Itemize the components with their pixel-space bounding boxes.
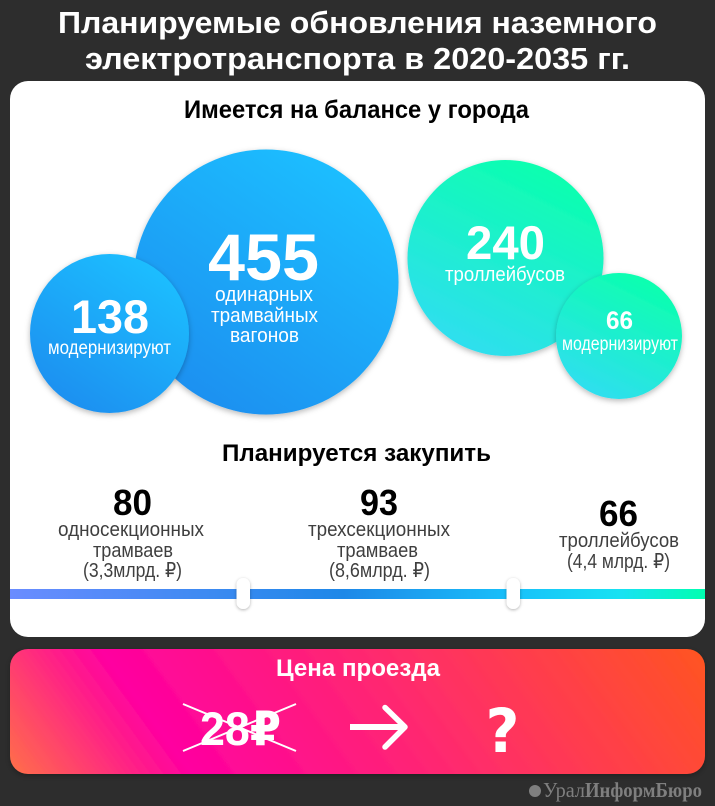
bubble: 240 trolleybuses: троллейбусов <box>445 264 565 286</box>
purchase: 66 trolleybuses: троллейбусов <box>559 530 679 552</box>
purchase: 80 single-section trams: (3,3млрд. ₽) <box>83 560 182 582</box>
purchase: 93 three-section trams <box>308 482 450 582</box>
heading: planned purchases: Планируется закупить <box>222 440 491 467</box>
purchase: 66 trolleybuses: (4,4 млрд. ₽) <box>567 551 670 573</box>
watermark: Урал <box>543 778 585 802</box>
watermark: ИнформБюро <box>585 778 702 802</box>
panel: fleet and purchases <box>10 81 705 637</box>
bubble: 138 modernized trams: 138 <box>71 290 149 343</box>
timeline bar <box>10 578 705 609</box>
purchase: 93 three-section trams: трехсекционных <box>308 519 450 541</box>
purchase: 93 three-section trams: (8,6млрд. ₽) <box>329 560 430 582</box>
heading: on the city's balance: Имеется на балансе у города <box>184 96 530 124</box>
panel: fare <box>10 649 705 774</box>
title: Планируемые обновления наземного <box>58 5 657 40</box>
purchase: 66 trolleybuses: 66 <box>599 493 638 534</box>
purchase: 80 single-section trams: односекционных <box>58 519 204 541</box>
bubble: 138 modernized trams <box>30 254 189 413</box>
purchase: 93 three-section trams: трамваев <box>337 540 418 562</box>
purchase: 80 single-section trams: 80 <box>113 482 152 523</box>
purchase: 80 single-section trams: трамваев <box>93 540 173 562</box>
crossed out fare 28 rubles: 28₽ <box>200 702 281 755</box>
bubble: 66 modernized trolleybuses: модернизируют <box>562 334 678 355</box>
bubble: 66 modernized trolleybuses <box>556 273 682 399</box>
bubble: 455 tram cars <box>134 150 398 414</box>
purchase: 66 trolleybuses <box>559 493 679 573</box>
purchase: 93 three-section trams: 93 <box>360 482 398 523</box>
title: электротранспорта в 2020-2035 гг. <box>85 41 630 76</box>
heading: fare: Цена проезда <box>276 655 441 682</box>
bubble: 240 trolleybuses: 240 <box>466 216 545 269</box>
bubble: 455 tram cars: одинарных <box>215 284 313 306</box>
question mark: ? <box>486 696 520 767</box>
watermark <box>529 778 702 802</box>
bubble: 66 modernized trolleybuses: 66 <box>606 307 633 335</box>
purchase: 80 single-section trams <box>58 482 204 582</box>
icon: arrow <box>350 708 405 747</box>
bubble: 138 modernized trams: модернизируют <box>48 338 171 359</box>
bubble: 455 tram cars: 455 <box>208 220 319 294</box>
bubble: 240 trolleybuses <box>408 160 604 356</box>
bubble: 455 tram cars: вагонов <box>230 325 299 347</box>
title <box>58 5 657 76</box>
bubble: 455 tram cars: трамвайных <box>211 305 318 327</box>
